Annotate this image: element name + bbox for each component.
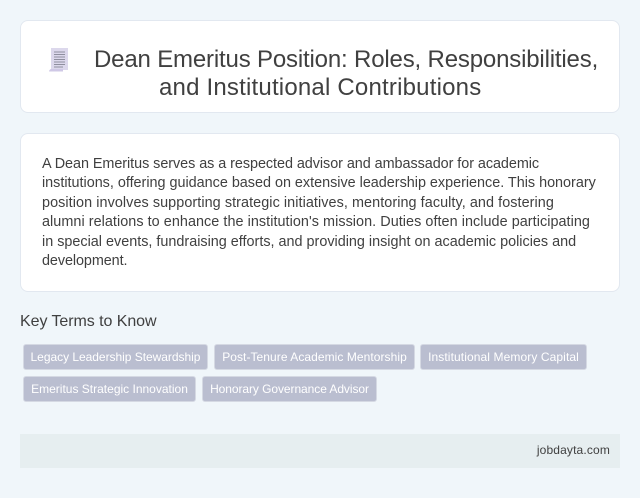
panel: title card (20, 20, 620, 113)
tag (23, 376, 196, 402)
tag list (23, 344, 587, 402)
tag: Post-Tenure Academic Mentorship (222, 350, 407, 364)
icon: document scroll (49, 48, 68, 72)
text block: description: in special events, fundraising efforts, and providing insight on academic policies and (42, 234, 576, 250)
text block: description: institutions, offering guidance based on extensive leadership experience. This honorary (42, 175, 596, 191)
heading: key terms: Key Terms to Know (20, 313, 157, 330)
title: Dean Emeritus Position: Roles, Responsibilities, (94, 46, 598, 73)
title: and Institutional Contributions (159, 74, 481, 101)
tag: Honorary Governance Advisor (210, 382, 369, 396)
footer bar (20, 434, 620, 468)
text block: description: A Dean Emeritus serves as a respected advisor and ambassador for academic (42, 156, 539, 172)
text block: description (42, 156, 596, 269)
tag: Legacy Leadership Stewardship (31, 350, 200, 364)
tag: Emeritus Strategic Innovation (31, 382, 188, 396)
panel: description (20, 133, 620, 292)
tag (214, 344, 415, 370)
text block: description: development. (42, 253, 127, 269)
text block: description: alumni relations to enhance the institution's mission. Duties often include participating (42, 214, 590, 230)
title (94, 46, 598, 101)
tag: Institutional Memory Capital (428, 350, 579, 364)
tag (23, 344, 208, 370)
footer source text: jobdayta.com (537, 443, 610, 457)
tag (420, 344, 587, 370)
text block: description: position involves supporting strategic initiatives, mentoring faculty, and fostering (42, 194, 554, 210)
tag (202, 376, 377, 402)
